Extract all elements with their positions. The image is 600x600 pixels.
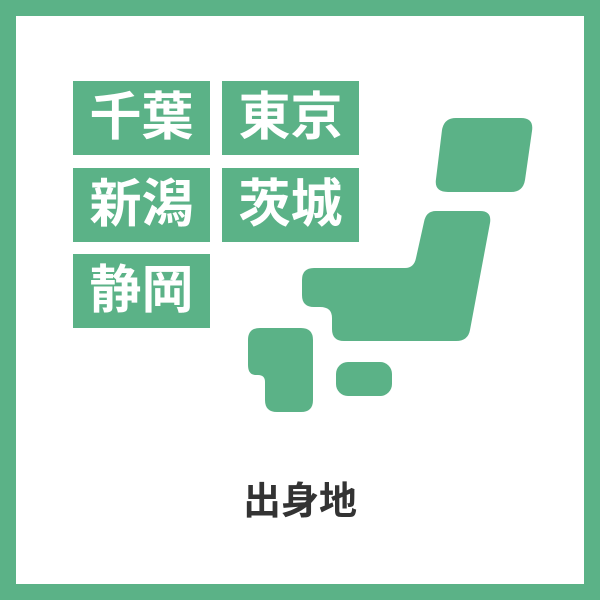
tag: 静岡: 静岡 <box>89 262 194 320</box>
tag: 茨城 <box>222 168 359 242</box>
tag: 新潟: 新潟 <box>89 176 194 234</box>
tag: 新潟 <box>73 168 210 242</box>
tag: 東京 <box>222 81 359 155</box>
icon: Honshu <box>302 211 490 341</box>
icon: Kyushu <box>248 328 313 412</box>
title: 出身地 <box>243 481 357 523</box>
icon: Hokkaido <box>436 118 532 192</box>
tag: 東京: 東京 <box>238 89 342 147</box>
icon: Shikoku <box>336 362 392 396</box>
tag: 千葉: 千葉 <box>89 89 194 147</box>
tag: 茨城: 茨城 <box>238 176 342 234</box>
tag: 静岡 <box>73 254 210 328</box>
tag: 千葉 <box>73 81 210 155</box>
